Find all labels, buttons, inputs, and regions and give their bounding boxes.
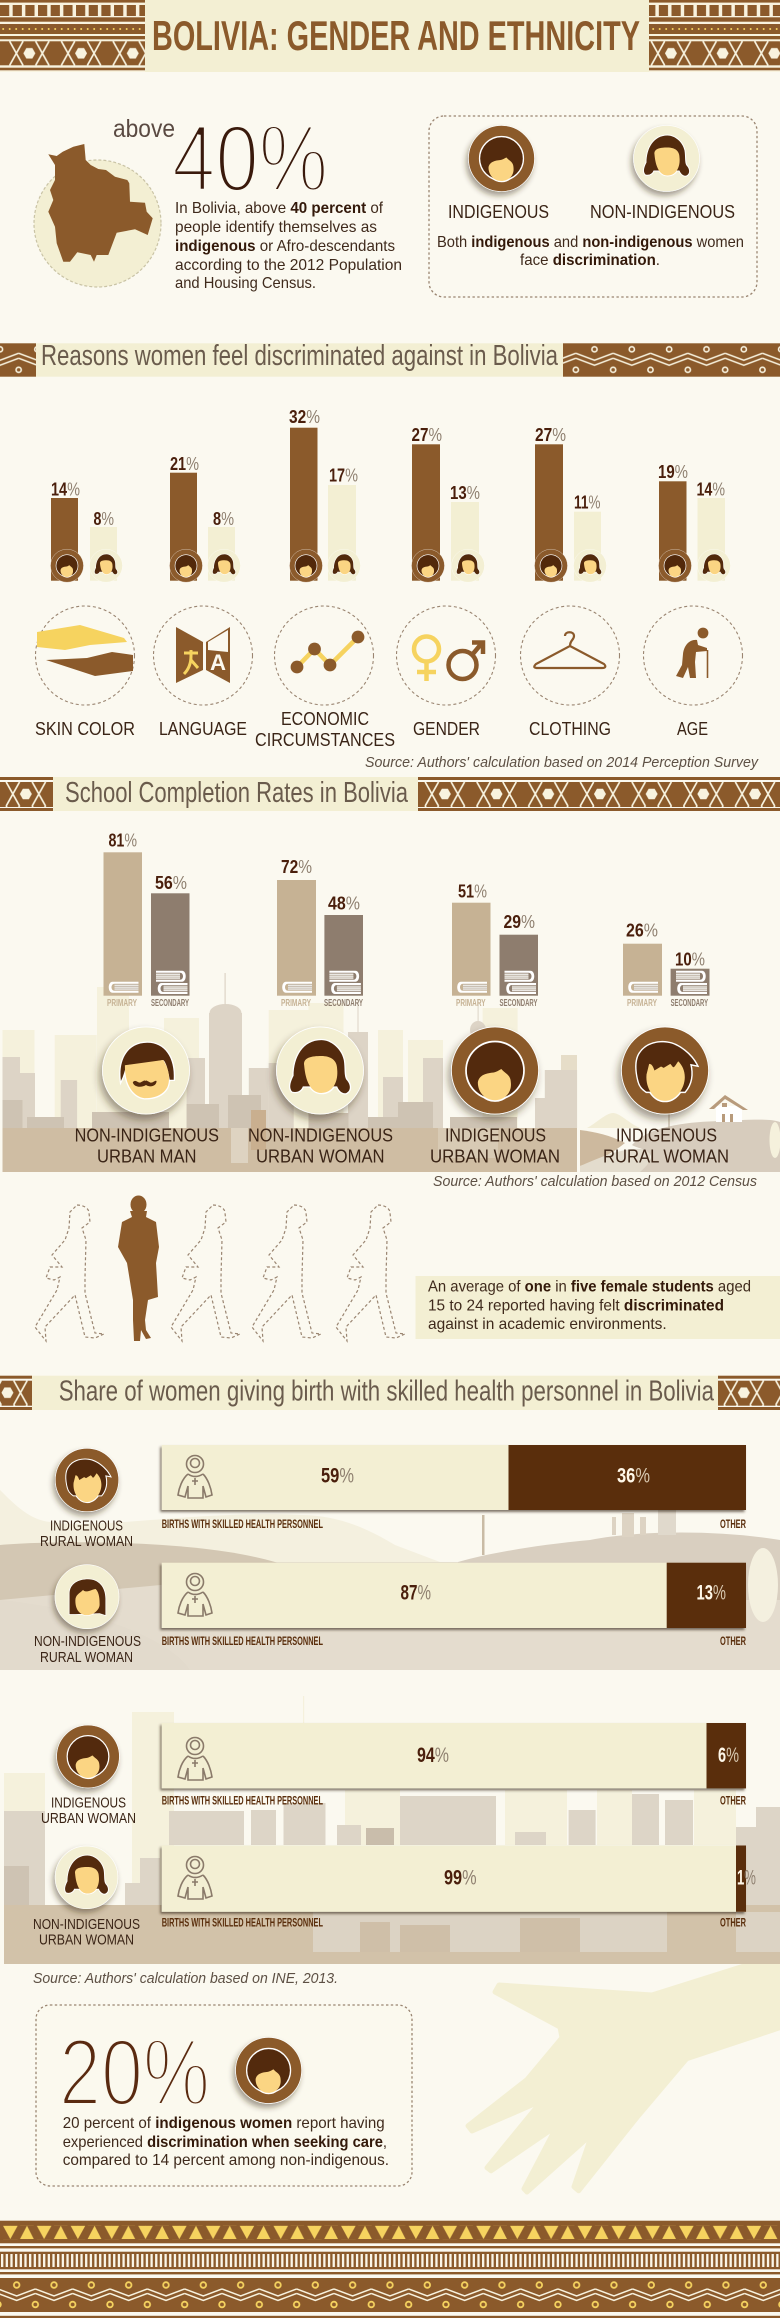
icon: elderly person (644, 606, 742, 705)
bars: non-indigenous urban man: SECONDARY (151, 998, 189, 1009)
bars: indigenous urban woman: 29% (504, 912, 535, 932)
footer pattern (0, 2221, 780, 2318)
labels: discrimination reasons: SKIN COLOR (35, 718, 135, 739)
icon: indigenous urban woman (451, 1027, 539, 1114)
label: non-indigenous rural woman: RURAL WOMAN (40, 1650, 133, 1666)
bar chart: school completion (104, 831, 710, 1009)
bar: non-indigenous rural woman: 13% (696, 1581, 726, 1604)
icon: economic circumstances (274, 606, 374, 705)
text block: both face discrimination: Both indigenous and non-indigenous women (437, 234, 744, 251)
bar: non-indigenous urban woman: 99% (444, 1866, 477, 1890)
bars: age: 14% (696, 480, 725, 500)
icon: non-indigenous woman (634, 126, 700, 192)
header pattern: left (0, 0, 145, 72)
icon: map of Bolivia (34, 144, 161, 287)
bars: skin color (50, 480, 122, 582)
bar: indigenous urban woman: 94% (417, 1744, 449, 1767)
header banner (0, 0, 780, 72)
pictogram: one in five female students (35, 1196, 405, 1341)
label: indigenous urban woman: URBAN WOMAN (41, 1811, 136, 1827)
bars: gender: 13% (450, 483, 480, 503)
text block: seeking care: experienced discrimination when seeking care, (63, 2134, 387, 2151)
bars: non-indigenous urban woman: 48% (328, 893, 360, 913)
label: indigenous rural woman: RURAL WOMAN (40, 1534, 133, 1550)
header pattern: right (649, 0, 780, 72)
bar: non-indigenous urban woman: BIRTHS WITH SKILLED HEALTH PERSONNEL (162, 1916, 323, 1930)
bars: non-indigenous urban woman (277, 857, 363, 1009)
label: indigenous urban woman (41, 1796, 136, 1827)
bars: non-indigenous urban man: 81% (108, 831, 137, 851)
bars: non-indigenous urban man (104, 831, 190, 1009)
bars: indigenous urban woman: 51% (458, 882, 487, 902)
icon: indigenous rural woman (55, 1448, 119, 1512)
bars: indigenous rural woman: PRIMARY (627, 998, 657, 1009)
bar: indigenous rural woman: OTHER (720, 1517, 746, 1531)
label: non-indigenous urban woman: NON-INDIGENOUS (33, 1917, 140, 1933)
labels: school groups (75, 1125, 729, 1167)
bars: indigenous rural woman: 26% (626, 921, 658, 941)
labels: discrimination reasons: CIRCUMSTANCES (255, 729, 395, 750)
source: perception survey: Source: Authors' calculation based on 2014 Perception Survey (365, 754, 759, 771)
label: indigenous rural woman (40, 1519, 133, 1550)
bars: language: 8% (213, 509, 234, 529)
bars: gender (412, 425, 484, 582)
bars: language (170, 454, 240, 582)
heading: reasons women feel discriminated: Reasons women feel discriminated against in Bolivia (41, 340, 559, 372)
bar: non-indigenous urban woman: OTHER (720, 1916, 746, 1930)
panel: indigenous and non-indigenous (429, 116, 757, 297)
icon: skin color (36, 606, 134, 705)
bars: economic circumstances (289, 407, 360, 582)
heading: school completion rates: School Completion Rates in Bolivia (65, 777, 409, 809)
bars: non-indigenous urban woman: 72% (281, 857, 312, 877)
bars: economic circumstances: 32% (289, 407, 320, 427)
text block: seeking care: compared to 14 percent among non-indigenous. (63, 2152, 389, 2169)
bars: non-indigenous urban woman: PRIMARY (281, 998, 311, 1009)
source: INE: Source: Authors' calculation based on INE, 2013. (33, 1970, 338, 1987)
bars: indigenous urban woman: SECONDARY (500, 998, 538, 1009)
bars: indigenous urban woman (452, 882, 538, 1009)
bar: non-indigenous rural woman: OTHER (720, 1634, 746, 1648)
icon: clothing hanger (520, 606, 620, 705)
bars: clothing (534, 425, 606, 582)
labels: discrimination reasons: GENDER (413, 718, 480, 739)
label: non-indigenous urban woman: URBAN WOMAN (39, 1932, 134, 1948)
bars: skin color: 14% (51, 480, 80, 500)
big number: 40%: 40% (172, 106, 328, 212)
background: rural landscape (0, 1490, 780, 1670)
callout: academic environments: 15 to 24 reported having felt discriminated (428, 1298, 724, 1315)
label: indigenous rural woman: INDIGENOUS (50, 1519, 123, 1535)
bars: gender: 27% (412, 425, 442, 445)
bar: indigenous rural woman: BIRTHS WITH SKILLED HEALTH PERSONNEL (162, 1517, 323, 1531)
bar: non-indigenous urban woman: 1% (737, 1866, 756, 1890)
label: non-indigenous: NON-INDIGENOUS (590, 201, 735, 222)
icon: indigenous rural woman (621, 1027, 709, 1114)
bar: non-indigenous rural woman: BIRTHS WITH SKILLED HEALTH PERSONNEL (162, 1634, 323, 1648)
big number: 20%: 20% (59, 2020, 210, 2126)
labels: school groups: URBAN WOMAN (430, 1146, 560, 1167)
text block: seeking care: 20 percent of indigenous women report having (63, 2115, 385, 2132)
illustration: reaching hand (468, 1954, 780, 2192)
icon: indigenous woman (236, 2037, 302, 2103)
bar: indigenous rural woman (162, 1445, 746, 1531)
labels: school groups: URBAN WOMAN (256, 1146, 385, 1167)
bars: indigenous urban woman: PRIMARY (456, 998, 486, 1009)
text block: census fact: people identify themselves as (175, 219, 377, 236)
bars: age: 19% (658, 462, 688, 482)
icon: non-indigenous rural woman (55, 1565, 119, 1629)
label: non-indigenous rural woman (34, 1634, 141, 1666)
bars: indigenous rural woman: SECONDARY (671, 998, 708, 1009)
bars: skin color: 8% (94, 509, 114, 529)
icons row: discrimination reasons (36, 606, 742, 705)
label: indigenous: INDIGENOUS (448, 201, 549, 222)
background: city skyline (2, 973, 577, 1172)
bar: indigenous urban woman: BIRTHS WITH SKILLED HEALTH PERSONNEL (162, 1793, 323, 1807)
text block: census fact: In Bolivia, above 40 percent of (175, 200, 384, 217)
bar: non-indigenous urban woman (162, 1846, 756, 1930)
callout: academic environments: against in academic environments. (428, 1316, 667, 1333)
bars: indigenous rural woman: 10% (675, 950, 705, 970)
bar: indigenous rural woman: 36% (617, 1465, 650, 1488)
bars: economic circumstances: 17% (329, 466, 358, 486)
bar: indigenous urban woman: 6% (718, 1744, 739, 1767)
callout: academic environments: An average of one in five female students aged (428, 1279, 751, 1296)
bars: clothing: 11% (574, 493, 600, 513)
labels: discrimination reasons: AGE (677, 718, 708, 739)
labels: school groups: RURAL WOMAN (603, 1146, 729, 1167)
bars: age (658, 462, 730, 582)
bars: non-indigenous urban woman: SECONDARY (324, 998, 363, 1009)
labels: school groups: INDIGENOUS (616, 1125, 717, 1146)
bar: non-indigenous rural woman (162, 1563, 746, 1648)
labels: school groups: NON-INDIGENOUS (75, 1125, 219, 1146)
header title plate (145, 0, 649, 72)
heading: school completion rates (0, 777, 780, 811)
text block: census fact: indigenous or Afro-descendants (175, 238, 395, 255)
bars: indigenous rural woman (623, 921, 710, 1009)
icon: language (154, 606, 252, 705)
bars: non-indigenous urban man: 56% (155, 873, 187, 893)
bar chart: reasons for discrimination (50, 407, 730, 582)
labels: discrimination reasons: ECONOMIC (281, 708, 369, 729)
icon: language: A (210, 650, 226, 675)
icon: indigenous urban woman (57, 1725, 119, 1788)
bar: indigenous urban woman (162, 1723, 746, 1807)
label: non-indigenous rural woman: NON-INDIGENOUS (34, 1634, 141, 1650)
labels: discrimination reasons: LANGUAGE (159, 718, 247, 739)
labels: discrimination reasons (35, 708, 708, 750)
text block: census fact: according to the 2012 Population (175, 257, 402, 274)
source: census: Source: Authors' calculation based on 2012 Census (433, 1173, 757, 1190)
bars: language: 21% (170, 454, 199, 474)
label: non-indigenous urban woman (33, 1917, 140, 1948)
text block: census fact (175, 200, 402, 292)
bar: indigenous urban woman: OTHER (720, 1793, 746, 1807)
icon: indigenous woman (468, 126, 534, 192)
labels: school groups: NON-INDIGENOUS (248, 1125, 393, 1146)
icon: gender (396, 606, 496, 705)
bar: non-indigenous rural woman: 87% (400, 1581, 431, 1604)
label: indigenous urban woman: INDIGENOUS (51, 1796, 126, 1812)
panel: 20 percent seeking care (36, 2005, 412, 2186)
panel: above 40 percent (34, 106, 402, 292)
label: above: above (113, 115, 175, 143)
bars: non-indigenous urban man: PRIMARY (107, 998, 137, 1009)
labels: school groups: INDIGENOUS (445, 1125, 546, 1146)
bars: clothing: 27% (535, 425, 566, 445)
text block: both face discrimination: face discrimination. (520, 252, 660, 269)
bar: indigenous rural woman: 59% (321, 1465, 354, 1488)
text block: seeking care (63, 2115, 389, 2169)
labels: discrimination reasons: CLOTHING (529, 718, 611, 739)
callout: academic environments (416, 1276, 780, 1339)
icon: non-indigenous urban woman (55, 1846, 118, 1909)
background: rural hills with house (580, 1095, 780, 1172)
labels: school groups: URBAN MAN (97, 1146, 196, 1167)
icon: non-indigenous urban man (102, 1027, 190, 1114)
icon: non-indigenous urban woman (276, 1027, 364, 1114)
background: second city skyline (4, 1696, 780, 1964)
text block: both face discrimination (437, 234, 744, 269)
text block: census fact: and Housing Census. (175, 275, 316, 292)
